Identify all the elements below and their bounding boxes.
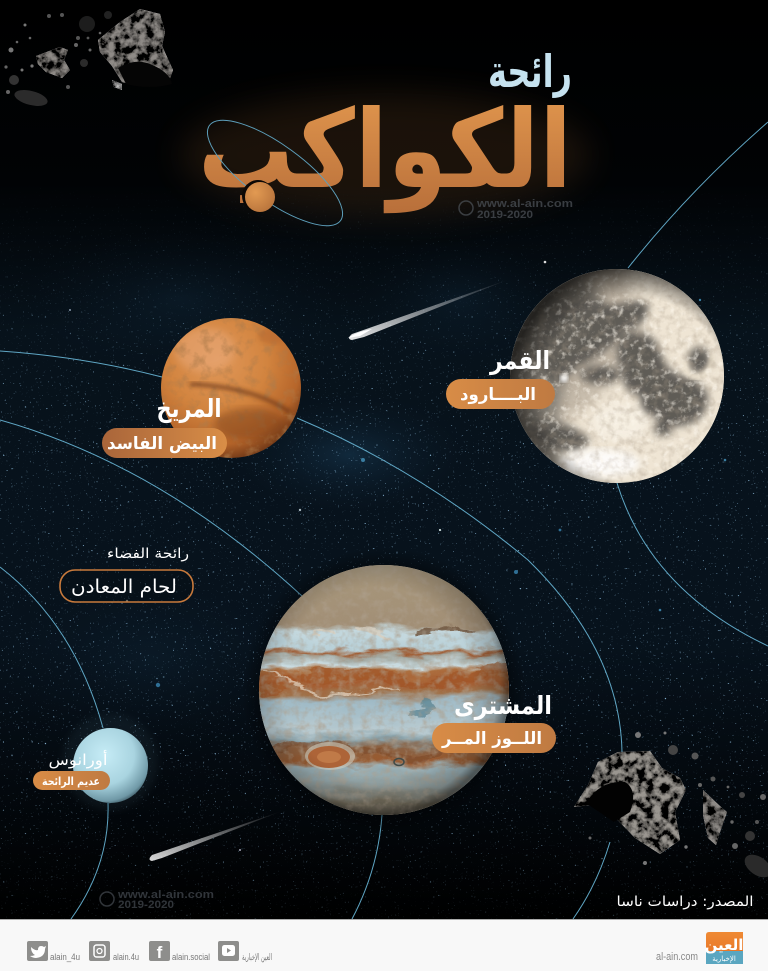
label: uranus: أورانوس (48, 750, 108, 769)
watermark bottom (100, 889, 214, 911)
label: jupiter: المشترى (454, 691, 552, 721)
label: space scent: لحام المعادن (71, 576, 177, 598)
great red spot (305, 742, 355, 770)
asteroids bottom right (574, 732, 768, 882)
asteroids top left (4, 9, 173, 109)
source: المصدر: دراسات ناسا (616, 894, 754, 910)
title: planets: الكواكب (198, 88, 572, 214)
planet: jupiter (242, 548, 526, 832)
footer: alain.social (172, 952, 210, 962)
icon: facebook (149, 941, 170, 962)
icon: instagram (89, 941, 110, 961)
footer: العين الإخبارية (242, 953, 272, 963)
label: uranus (33, 750, 110, 790)
watermark bottom: www.al-ain.com (117, 889, 214, 901)
label: mars (102, 394, 227, 458)
footer: alain_4u (50, 952, 80, 962)
logo: العين (705, 936, 743, 954)
label: mars: البيض الفاسد (107, 434, 217, 454)
logo (705, 932, 743, 964)
icon: twitter (27, 941, 48, 961)
title orbit with small planet (193, 103, 357, 243)
space background (0, 188, 768, 919)
icon: facebook: f (157, 943, 163, 962)
logo: الإخبارية (712, 955, 736, 963)
watermark top (459, 198, 573, 221)
watermark bottom: 2019-2020 (118, 899, 174, 911)
label: mars: المريخ (156, 394, 222, 424)
icon: youtube (218, 941, 239, 961)
footer: alain.4u (113, 952, 139, 962)
comet upper (348, 279, 510, 340)
label: jupiter: اللــوز المــر (441, 729, 542, 749)
label: uranus: عديم الرائحة (42, 775, 100, 788)
label: space scent (60, 546, 193, 602)
label: moon: القمر (488, 346, 550, 376)
footer (0, 919, 768, 971)
label: moon (446, 346, 555, 409)
label: jupiter (432, 691, 556, 753)
planet: uranus (62, 714, 158, 810)
watermark top: 2019-2020 (477, 209, 533, 221)
planet: mars (160, 316, 302, 458)
comet lower (150, 811, 282, 861)
planet: moon (510, 269, 724, 483)
watermark top: www.al-ain.com (476, 198, 573, 210)
label: moon: البــــارود (460, 385, 536, 405)
title: scent of: رائحة (488, 45, 572, 98)
label: space scent: رائحة الفضاء (107, 546, 189, 562)
footer: al-ain.com (656, 951, 698, 963)
